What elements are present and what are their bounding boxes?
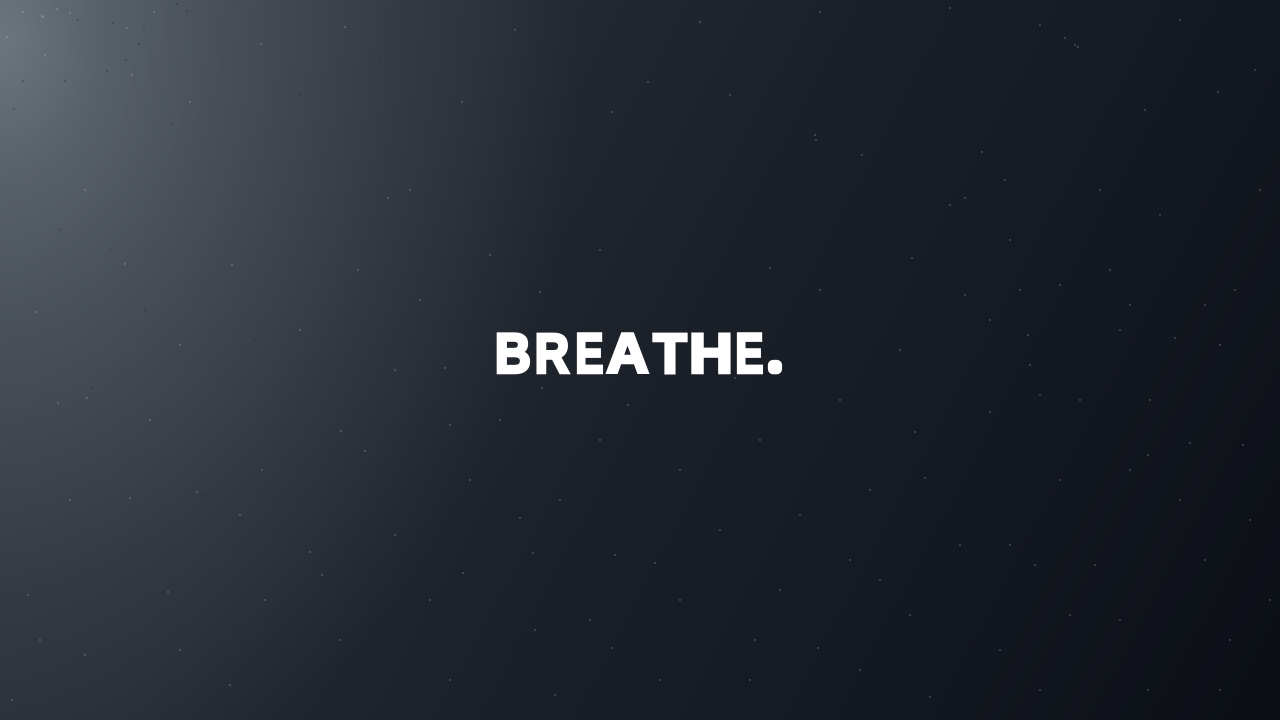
title: . bbox=[771, 345, 779, 375]
title: E bbox=[735, 323, 763, 385]
title: H bbox=[689, 323, 733, 385]
title: T bbox=[653, 322, 687, 385]
title: A bbox=[606, 323, 649, 385]
title: R bbox=[535, 323, 569, 385]
title: E bbox=[575, 323, 603, 385]
title: B bbox=[495, 323, 531, 385]
